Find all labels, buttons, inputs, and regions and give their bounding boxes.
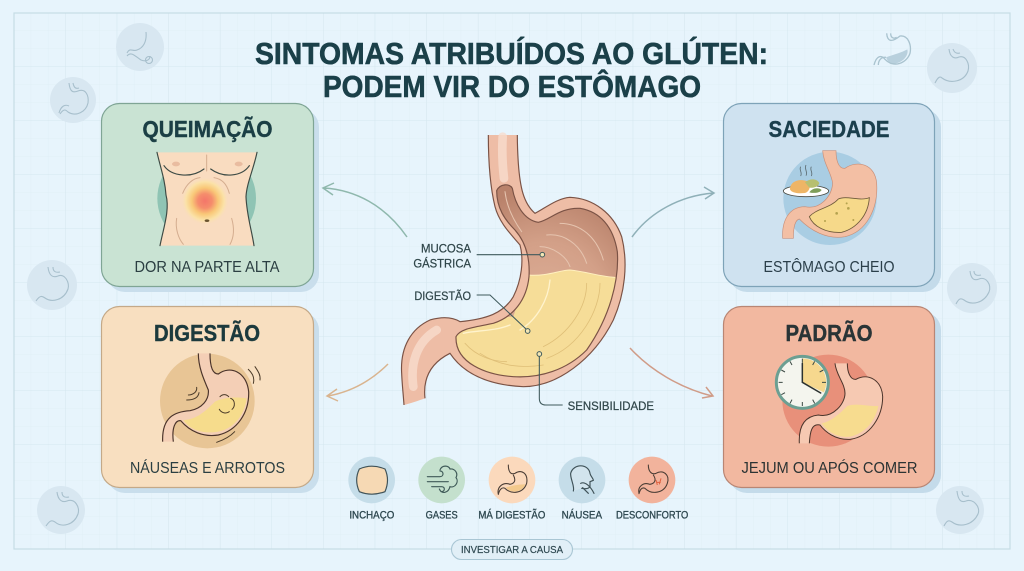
label: gases: GASES (426, 509, 458, 521)
title: SINTOMAS ATRIBUÍDOS AO GLÚTEN: (255, 35, 768, 71)
icon: náusea (559, 457, 605, 503)
labels: SENSIBILIDADE (568, 399, 654, 413)
icon: desconforto (629, 457, 675, 503)
gastric mucosa (456, 185, 618, 377)
labels (413, 242, 654, 413)
panel: padrão (724, 306, 941, 493)
call to action pill: INVESTIGAR A CAUSA (461, 544, 563, 556)
decorative stomach badge: right middle (947, 263, 997, 313)
label: inchaço: INCHAÇO (349, 509, 395, 521)
icon: gases (418, 457, 465, 503)
caption: estômago cheio: ESTÔMAGO CHEIO (764, 259, 894, 276)
arrow: to queimação (323, 183, 407, 237)
wall outline (402, 135, 625, 405)
decorative stomach badge: top left 2 (50, 77, 96, 123)
digestive contents (456, 270, 616, 376)
arrow: to digestão (327, 364, 388, 401)
label: má digestão: MÁ DIGESTÃO (478, 508, 546, 521)
labels: DIGESTÃO (414, 289, 471, 303)
gastric folds (505, 192, 603, 267)
title (255, 35, 768, 104)
icon: inchaço (348, 457, 395, 503)
panel: saciedade (724, 104, 941, 292)
panel: digestão (102, 306, 319, 493)
symptom row (348, 457, 689, 521)
plate (783, 185, 829, 197)
arrow: to padrão (630, 348, 713, 398)
labels: GÁSTRICA (413, 256, 472, 271)
decorative stomach badge: left bottom (37, 486, 85, 534)
decorative stomach badge: right bottom (936, 486, 984, 534)
caption: jejum ou após comer: JEJUM OU APÓS COMER (742, 460, 918, 477)
caption: náuseas e arrotos: NÁUSEAS E ARROTOS (130, 460, 285, 477)
icon: nauseous stomach (160, 353, 260, 448)
decorative stomach badge: top right 2 (927, 43, 977, 93)
call to action pill (452, 540, 572, 560)
heading: digestão: DIGESTÃO (154, 319, 260, 346)
leader lines (477, 255, 563, 405)
decorative stomach badge: left middle (27, 260, 77, 310)
labels: MUCOSA (421, 242, 472, 256)
icon: má digestão (489, 457, 535, 503)
stomach wall (402, 135, 625, 405)
decorative stomach badge: top left 1 (116, 23, 164, 71)
icon: abdomen with burning spot (157, 149, 257, 248)
title: PODEM VIR DO ESTÔMAGO (323, 68, 701, 104)
highlights (413, 137, 504, 387)
label: desconforto: DESCONFORTO (616, 509, 689, 521)
heading: padrão: PADRÃO (786, 319, 872, 346)
icon: stomach full of food with plate (783, 151, 877, 245)
label: náusea: NÁUSEA (562, 508, 603, 521)
caption: dor na parte alta: DOR NA PARTE ALTA (134, 259, 280, 276)
heading: queimação: QUEIMAÇÃO (142, 115, 272, 142)
arrow: to saciedade (632, 187, 714, 237)
decorative stomach icon: top right 1 (874, 33, 910, 65)
heading: saciedade: SACIEDADE (768, 116, 890, 142)
icon: clock and stomach (776, 355, 883, 447)
panel: queimação (102, 104, 319, 292)
central stomach diagram (402, 135, 654, 413)
